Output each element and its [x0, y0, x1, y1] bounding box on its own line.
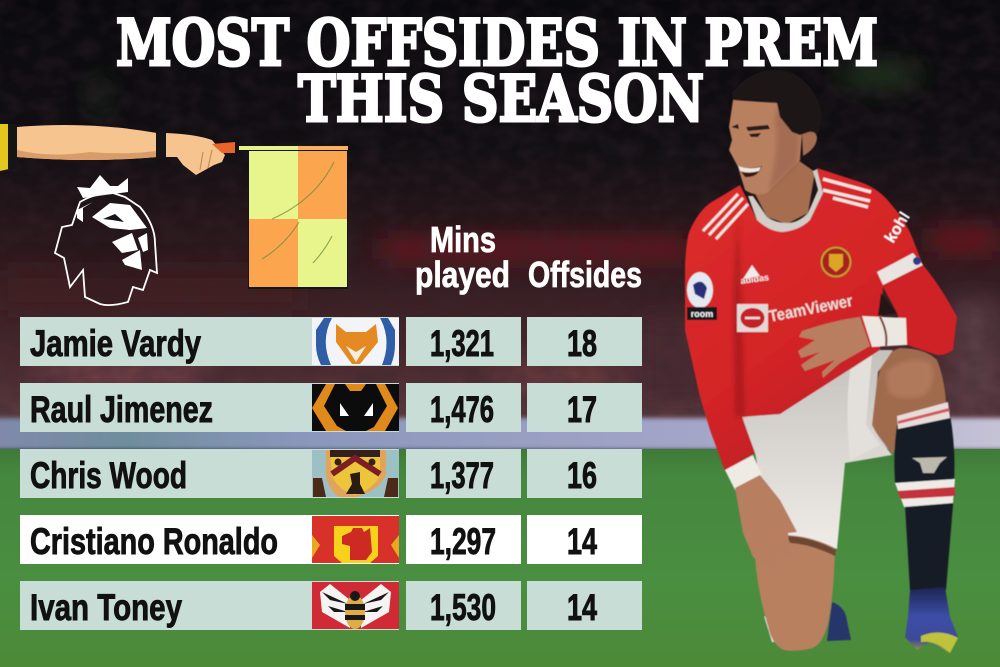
sponsor Kohler text: kohl	[882, 209, 914, 246]
raised thigh and knee	[872, 348, 946, 455]
hand	[166, 133, 225, 175]
row: Cristiano Ronaldo: 1,297	[430, 521, 496, 562]
badge: Brentford	[312, 582, 399, 629]
premier league sleeve patch	[687, 272, 717, 320]
row: Jamie Vardy	[20, 317, 642, 366]
right forearm	[883, 265, 957, 355]
adidas logo	[740, 265, 770, 286]
collar	[748, 169, 823, 232]
row: Jamie Vardy: 18	[567, 323, 597, 364]
black cuff	[8, 124, 17, 169]
row: Jamie Vardy: 1,321	[430, 323, 494, 364]
left cuff	[725, 455, 762, 490]
yellow sleeve	[0, 124, 9, 171]
row: Raul Jimenez: 1,476	[430, 389, 494, 430]
player: Cristiano Ronaldo kneeling	[685, 70, 958, 653]
row: Jamie Vardy: Jamie Vardy	[30, 323, 201, 364]
captain armband	[877, 253, 923, 285]
shirt	[685, 168, 923, 471]
row: Ivan Toney	[20, 581, 642, 630]
column header: mins played	[415, 219, 510, 295]
chequered flag	[248, 150, 348, 289]
TeamViewer sponsor	[737, 292, 855, 332]
row: Chris Wood: 16	[567, 455, 597, 496]
sock top stripes	[897, 402, 950, 429]
hair	[732, 70, 822, 135]
right hand	[798, 317, 870, 378]
mouth	[737, 166, 762, 177]
column header: offsides: Offsides	[528, 254, 642, 295]
column header: mins played: played	[415, 254, 510, 295]
row: Ivan Toney: 1,530	[430, 587, 496, 628]
row: Cristiano Ronaldo: Cristiano Ronaldo	[30, 521, 278, 562]
ear	[802, 132, 817, 156]
flag pole	[239, 146, 348, 151]
row: Chris Wood: Chris Wood	[30, 455, 187, 496]
row: Ivan Toney: 14	[567, 587, 597, 628]
crown	[77, 175, 128, 198]
row: Raul Jimenez: 17	[567, 389, 597, 430]
flag handle	[212, 142, 235, 153]
lion face	[92, 203, 147, 230]
boot	[905, 587, 958, 653]
row: Cristiano Ronaldo	[20, 515, 642, 564]
premier league sleeve patch: room	[691, 309, 713, 319]
column header: mins played: Mins	[430, 219, 496, 260]
face	[729, 100, 802, 194]
badge: Wolves	[312, 384, 399, 431]
shirt folds shading	[733, 215, 745, 416]
right wrist band	[862, 316, 907, 347]
shorts	[742, 350, 893, 549]
shoulder stripes	[823, 179, 871, 207]
lion outline	[55, 193, 157, 305]
sock band	[895, 457, 955, 507]
row: Ivan Toney: Ivan Toney	[30, 587, 182, 628]
title: THIS SEASON	[298, 62, 704, 137]
row: Cristiano Ronaldo: 14	[567, 521, 597, 562]
kneeling thigh	[755, 525, 835, 651]
left sleeve stripes	[703, 194, 748, 239]
neck	[752, 160, 815, 224]
left hand	[735, 475, 797, 568]
linesman arm holding flag	[0, 124, 348, 289]
dark gap between body and arm	[878, 293, 897, 316]
left sock sliver	[764, 616, 776, 642]
row: Raul Jimenez	[20, 383, 642, 432]
TeamViewer sponsor: TeamViewer	[767, 292, 855, 326]
adidas logo: adidas	[740, 272, 770, 286]
badge: Burnley	[312, 450, 399, 497]
Premier League lion logo	[55, 175, 157, 305]
thigh shadow under shorts	[787, 536, 836, 556]
row: Chris Wood: 1,377	[430, 455, 494, 496]
badge: Leicester City	[312, 318, 399, 365]
wristband	[156, 131, 166, 159]
arm	[17, 125, 157, 160]
badge: Manchester United	[312, 516, 399, 563]
row: Chris Wood	[20, 449, 642, 498]
back foot	[827, 602, 851, 641]
row: Raul Jimenez: Raul Jimenez	[30, 389, 213, 430]
sock	[894, 414, 954, 590]
club crest	[820, 246, 852, 278]
eyebrows and eyes	[731, 124, 770, 137]
title	[116, 6, 878, 137]
